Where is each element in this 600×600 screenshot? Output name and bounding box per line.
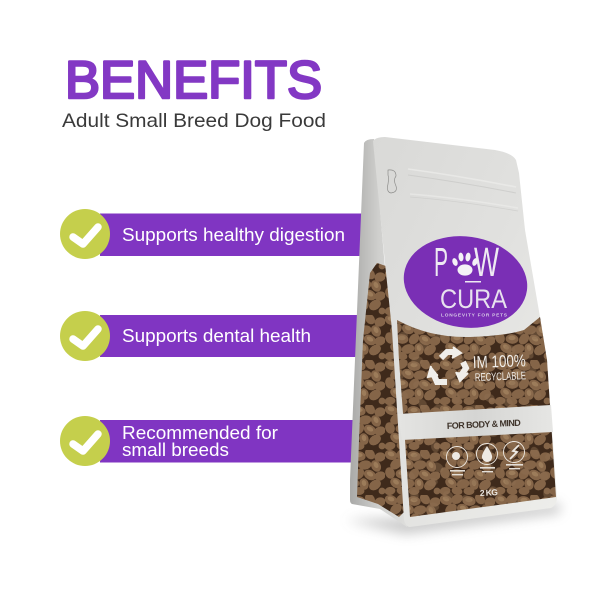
gusset kibble [357,263,404,517]
white band [398,405,553,440]
product bag [350,137,557,527]
benefit row: digestion [60,209,366,259]
logo oval [398,228,533,336]
check badge [60,416,110,466]
benefit label: Supports healthy digestion [122,224,345,245]
recyclable mark [428,347,526,384]
check badge [60,311,110,361]
benefit bar [100,214,366,256]
bag shadow [345,503,560,534]
feature icons [446,442,524,475]
weight label: 2 KG [480,487,498,498]
icon: recycle [428,347,468,382]
zip seal [408,169,518,211]
benefit bar [100,420,356,462]
benefit row: small breeds [60,416,356,466]
recyclable text: IM 100% [472,351,526,372]
icon: dog feature [446,446,468,475]
icon: paw [451,252,479,276]
benefit row: dental [60,311,362,361]
icon: bolt feature [504,442,524,469]
logo word PAW: P [434,239,448,285]
hang hole [387,170,396,193]
benefit bar [100,315,362,357]
check badge [60,209,110,259]
benefit label: Supports dental health [122,325,311,346]
side gusset [350,139,407,527]
benefit label [122,422,278,460]
front kibble [397,317,556,517]
logo dash [465,281,481,282]
benefit label: Recommended for [122,422,278,443]
recyclable mark: RECYCLABLE [475,370,526,384]
logo word CURA: CURA [440,284,507,314]
title: BENEFITS [65,51,322,110]
front panel [373,137,557,527]
icon: drop feature [476,444,498,472]
subtitle: Adult Small Breed Dog Food [62,110,326,132]
benefit label: small breeds [122,439,229,460]
logo tagline: LONGEVITY FOR PETS [441,312,508,318]
band text: FOR BODY & MIND [447,418,522,431]
logo oval: W [474,239,499,285]
